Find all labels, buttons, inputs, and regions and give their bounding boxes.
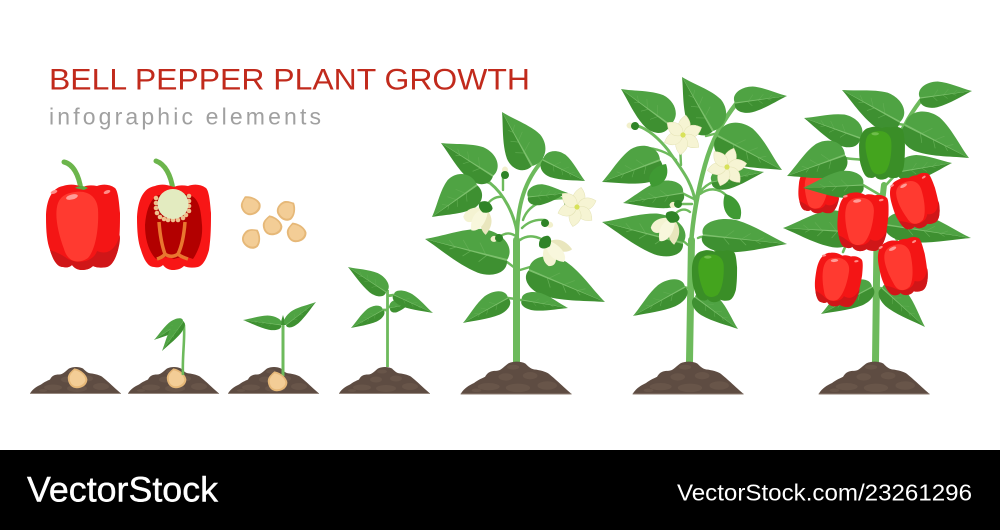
upper left leaves bbox=[780, 135, 864, 200]
stems bbox=[843, 100, 921, 362]
green pepper bbox=[692, 250, 737, 302]
icon: pepper seeds bbox=[237, 192, 308, 252]
leaves bbox=[595, 66, 793, 338]
soil mound bbox=[819, 362, 930, 394]
footer image id: VectorStock.com/23261296 bbox=[677, 480, 972, 506]
soil mound bbox=[461, 362, 572, 394]
stage 5: flowering plant bbox=[420, 101, 614, 394]
subtitle: infographic elements bbox=[49, 104, 321, 130]
leaves bbox=[782, 73, 979, 335]
stage 4: young plant bbox=[339, 257, 437, 394]
title: BELL PEPPER PLANT GROWTH bbox=[49, 64, 530, 96]
stems bbox=[638, 104, 736, 362]
stage 3: seedling with two leaves bbox=[228, 296, 320, 394]
stage 1: seed in soil bbox=[30, 366, 121, 394]
stems bbox=[466, 160, 567, 362]
leaves bbox=[420, 101, 614, 332]
stage 7: mature plant with red peppers bbox=[780, 73, 979, 394]
footer bar bbox=[0, 450, 1000, 530]
soil mound bbox=[633, 362, 744, 394]
peppers bbox=[811, 127, 944, 310]
footer logo text: VectorStock bbox=[27, 470, 219, 510]
stage 2: germinating sprout bbox=[128, 315, 219, 394]
icon: whole red pepper bbox=[46, 162, 120, 270]
flowers and buds bbox=[459, 166, 601, 272]
back red pepper bbox=[796, 167, 842, 215]
flowers, buds and small fruit bbox=[626, 112, 753, 247]
icon: halved red pepper bbox=[137, 161, 211, 270]
stage 6: plant with green pepper bbox=[595, 66, 793, 394]
